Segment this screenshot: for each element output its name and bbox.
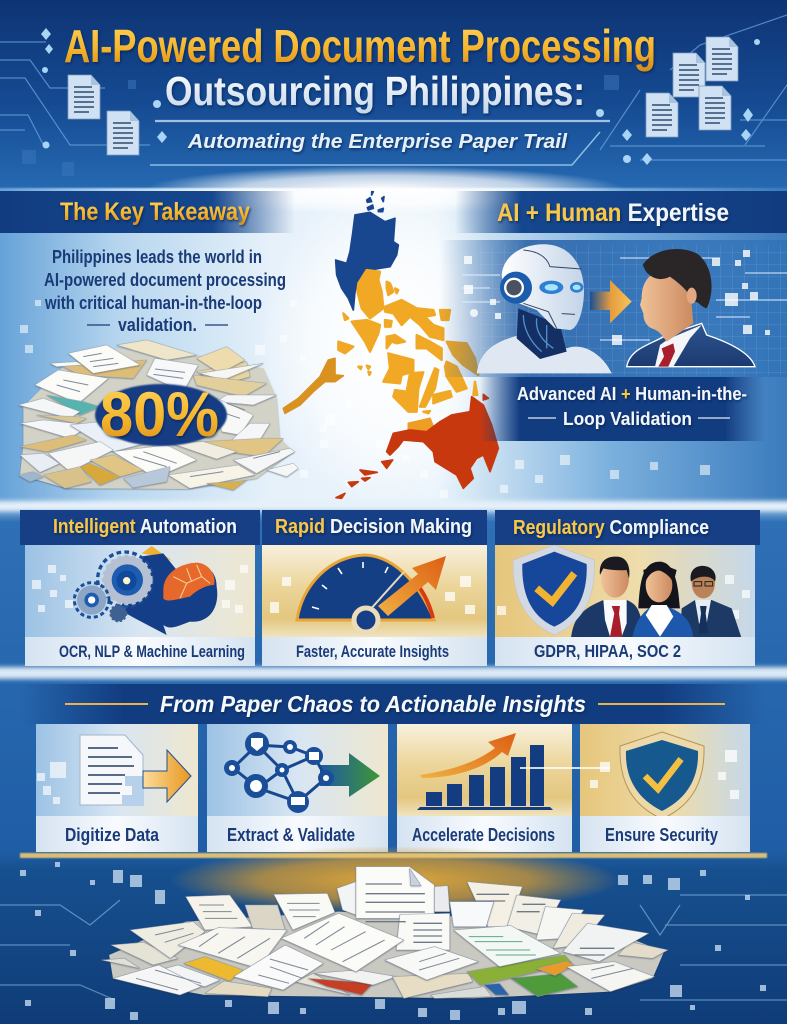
band: heading <box>495 510 760 545</box>
caption: Ensure Security <box>605 825 718 845</box>
band: heading: Regulatory Compliance <box>513 516 709 539</box>
caption <box>495 637 755 666</box>
region: Mindanao (red) <box>336 394 498 498</box>
header circuit lines and document icons <box>0 15 787 176</box>
callout: Advanced AI + Human-in-the-Loop Validation: Advanced AI + Human-in-the- <box>517 384 747 404</box>
panel: Digitize Data <box>36 724 198 852</box>
caption: GDPR, HIPAA, SOC 2 <box>534 641 681 661</box>
text block: key takeaway: Philippines leads the world in <box>52 246 262 267</box>
heading: The Key Takeaway <box>0 191 295 233</box>
icon: shield <box>513 545 594 635</box>
region: Luzon (blue) <box>336 192 398 310</box>
caption <box>207 816 388 852</box>
icon: growth arrow <box>420 733 516 778</box>
panel: Intelligent Automation <box>20 510 260 666</box>
heading: The Key Takeaway: The Key Takeaway <box>60 198 250 226</box>
caption: Digitize Data <box>65 825 160 845</box>
caption <box>580 816 750 852</box>
title <box>64 20 656 114</box>
text block: key takeaway: AI-powered document processing <box>44 269 286 290</box>
region: Palawan <box>283 358 343 413</box>
banner: From Paper Chaos to Actionable Insights: From Paper Chaos to Actionable Insights <box>160 691 586 717</box>
icon: shield <box>620 732 704 819</box>
text block: key takeaway: with critical human-in-the-loop <box>44 292 262 313</box>
icon: gears and brain <box>74 546 217 635</box>
human <box>627 249 755 367</box>
callout: Advanced AI + Human-in-the-Loop Validation: Loop Validation <box>563 409 692 429</box>
bottom gold glow and data pixels <box>0 846 787 1020</box>
panel: Regulatory Compliance <box>495 510 760 666</box>
heading: AI + Human Expertise: AI + Human Expertise <box>497 199 729 227</box>
callout: Advanced AI + Human-in-the-Loop Validation <box>480 377 765 441</box>
heading: AI + Human Expertise <box>455 191 787 233</box>
arrow <box>320 753 380 797</box>
panel: Extract & Validate <box>207 724 388 852</box>
icon: document <box>80 735 143 805</box>
caption: Faster, Accurate Insights <box>296 642 449 661</box>
title: Outsourcing Philippines: <box>165 68 585 114</box>
caption <box>397 816 572 852</box>
region: Mindanao top <box>408 418 433 433</box>
robot <box>477 244 612 373</box>
caption <box>25 637 255 666</box>
icon: network <box>224 732 334 813</box>
caption <box>36 816 198 852</box>
text block: key takeaway: validation. <box>118 314 197 335</box>
caption: OCR, NLP & Machine Learning <box>59 642 245 661</box>
stat: 80%: 80% <box>100 380 219 450</box>
lines of document and arrow <box>88 748 191 806</box>
band: heading: Intelligent Automation <box>53 515 237 538</box>
subtitle: Automating the Enterprise Paper Trail <box>187 131 567 153</box>
map: Philippines <box>283 192 498 498</box>
band: heading <box>262 510 487 545</box>
caption: Extract & Validate <box>227 825 355 845</box>
panel: Accelerate Decisions <box>397 724 572 852</box>
caption <box>262 637 487 666</box>
band: heading: Rapid Decision Making <box>275 515 472 538</box>
region: Central islands (orange) <box>338 270 478 413</box>
icons: three professionals <box>571 557 742 638</box>
icon: bar chart <box>417 745 553 810</box>
text block: key takeaway <box>44 246 286 335</box>
banner: From Paper Chaos to Actionable Insights <box>20 684 765 724</box>
paper pile with 80% <box>18 340 298 490</box>
arrow: AI to human <box>590 280 632 323</box>
panel: Ensure Security <box>520 724 750 852</box>
band: heading <box>20 510 260 545</box>
illustration: scattered papers <box>101 867 668 998</box>
panel: Rapid Decision Making <box>262 510 487 666</box>
icon: speedometer with arrow <box>297 555 446 632</box>
background data pixels <box>20 300 710 498</box>
illustration: robot and human <box>440 240 787 377</box>
caption: Accelerate Decisions <box>412 825 555 845</box>
